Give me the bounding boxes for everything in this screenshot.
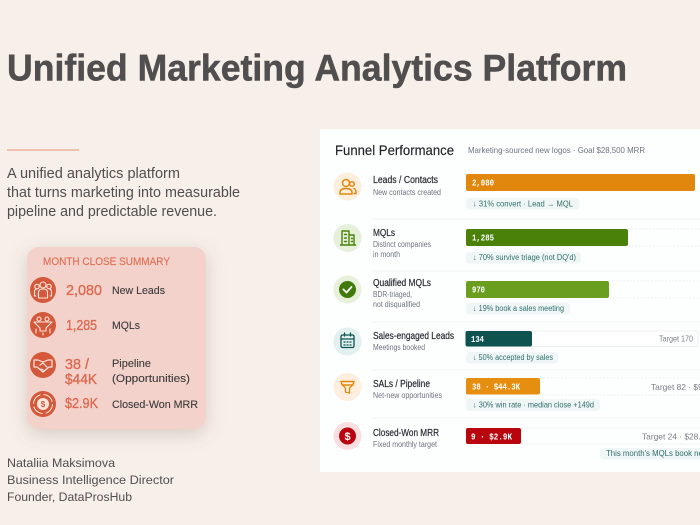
- meeting pill: ↓ 19% book a sales meeting: [473, 304, 564, 313]
- SAL label: Net-new opportunities: [373, 391, 442, 400]
- sales-engaged bar: 134: [471, 335, 485, 345]
- SAL bar: 38 · $44.3K: [472, 382, 521, 392]
- intro text: pipeline and predictable revenue.: [7, 204, 217, 220]
- leads label: New contacts created: [373, 188, 441, 197]
- leads label: Leads / Contacts: [373, 175, 438, 186]
- row: SALs: [334, 373, 700, 411]
- row: qualified MQLs: [334, 276, 700, 314]
- qualified bar: 970: [472, 286, 485, 296]
- intro text: A unified analytics platform: [7, 166, 180, 182]
- sales-engaged label: Sales-engaged Leads: [373, 331, 454, 342]
- accepted pill: ↓ 50% accepted by sales: [473, 353, 553, 362]
- row: sales-engaged leads: [334, 328, 698, 364]
- icon: building: [334, 224, 362, 252]
- panel: month close summary: [27, 247, 206, 429]
- sales-engaged label: [373, 331, 454, 352]
- MQL bar: 1,285: [472, 234, 494, 244]
- sales-engaged label: Meetings booked: [373, 343, 425, 352]
- stat: closed-won MRR: Closed-Won MRR: [112, 399, 198, 411]
- panel subtitle: Marketing-sourced new logos · Goal $28,500 MRR: [468, 145, 645, 155]
- MQL label: [373, 228, 431, 259]
- author credit: Business Intelligence Director: [7, 473, 174, 487]
- leads bar: [466, 174, 695, 191]
- closed-won label: Fixed monthly target: [373, 440, 438, 449]
- panel heading: Funnel Performance: [335, 142, 454, 158]
- stat: MQLs: 1,285: [66, 317, 97, 334]
- icon: check: [334, 276, 362, 304]
- summary heading: MONTH CLOSE SUMMARY: [43, 256, 171, 268]
- stat: MQLs: [66, 317, 140, 334]
- stat: closed-won MRR: [65, 395, 198, 412]
- closed-won bar: [466, 428, 700, 444]
- leads bar: 2,080: [472, 178, 494, 188]
- author credit: Founder, DataProsHub: [7, 490, 132, 504]
- SAL label: [373, 379, 442, 400]
- qualified label: not disqualified: [373, 300, 420, 309]
- MQL bar: [466, 229, 700, 246]
- stat: new leads: New Leads: [112, 285, 165, 297]
- icon: dollar: [334, 422, 362, 450]
- stat: pipeline: $44K: [65, 371, 97, 388]
- qualified label: [373, 278, 431, 309]
- intro text: [7, 166, 240, 220]
- icon: contacts: [334, 172, 362, 200]
- stat: MQLs: MQLs: [112, 320, 140, 332]
- closed-won label: [373, 428, 439, 449]
- qualified label: BDR-triaged,: [373, 290, 412, 299]
- closed-won bar: 9 · $2.9K: [471, 432, 513, 442]
- row: leads: [334, 172, 695, 210]
- stat: new leads: [66, 282, 165, 299]
- sales-engaged bar: [466, 331, 698, 346]
- icon: handshake: [30, 352, 56, 378]
- title: Unified Marketing Analytics Platform: [7, 48, 627, 88]
- sales-engaged bar: Target 170: [659, 334, 693, 344]
- icon: closed-won coin: [30, 391, 56, 417]
- icon: dollar: $: [344, 431, 351, 443]
- MQL label: MQLs: [373, 228, 395, 239]
- icon: closed-won coin: $: [41, 400, 46, 409]
- SAL label: SALs / Pipeline: [373, 379, 430, 390]
- stat: new leads: 2,080: [66, 282, 102, 299]
- stat: pipeline: Pipeline: [112, 358, 151, 370]
- win-rate pill: ↓ 30% win rate · median close +149d: [473, 400, 594, 410]
- MQL label: Distinct companies: [373, 240, 431, 249]
- stat: pipeline: (Opportunities): [112, 373, 190, 385]
- panel: funnel performance: [320, 129, 700, 472]
- accent rule: [7, 149, 79, 151]
- triage pill: ↓ 70% survive triage (not DQ'd): [473, 253, 576, 262]
- stat: pipeline: [65, 356, 190, 388]
- icon: MQL funnel: [30, 312, 56, 338]
- icon: calendar: [334, 328, 362, 356]
- stat: closed-won MRR: $2.9K: [65, 395, 98, 412]
- stat: pipeline: 38 /: [65, 356, 90, 373]
- MQL label: in month: [373, 250, 400, 259]
- icon: funnel: [334, 373, 362, 401]
- closed-won label: Closed-Won MRR: [373, 428, 439, 439]
- conversion pill: ↓ 31% convert · Lead → MQL: [473, 200, 574, 208]
- SAL bar: [466, 378, 700, 395]
- row: closed-won: [334, 422, 700, 460]
- icon: leads group: [30, 277, 56, 303]
- qualified bar: [466, 281, 700, 298]
- row: MQLs: [334, 224, 700, 264]
- intro text: that turns marketing into measurable: [7, 185, 240, 201]
- qualified label: Qualified MQLs: [373, 278, 431, 289]
- leads label: [373, 175, 441, 197]
- author credit: Nataliia Maksimova: [7, 456, 115, 470]
- author credit: [7, 456, 174, 504]
